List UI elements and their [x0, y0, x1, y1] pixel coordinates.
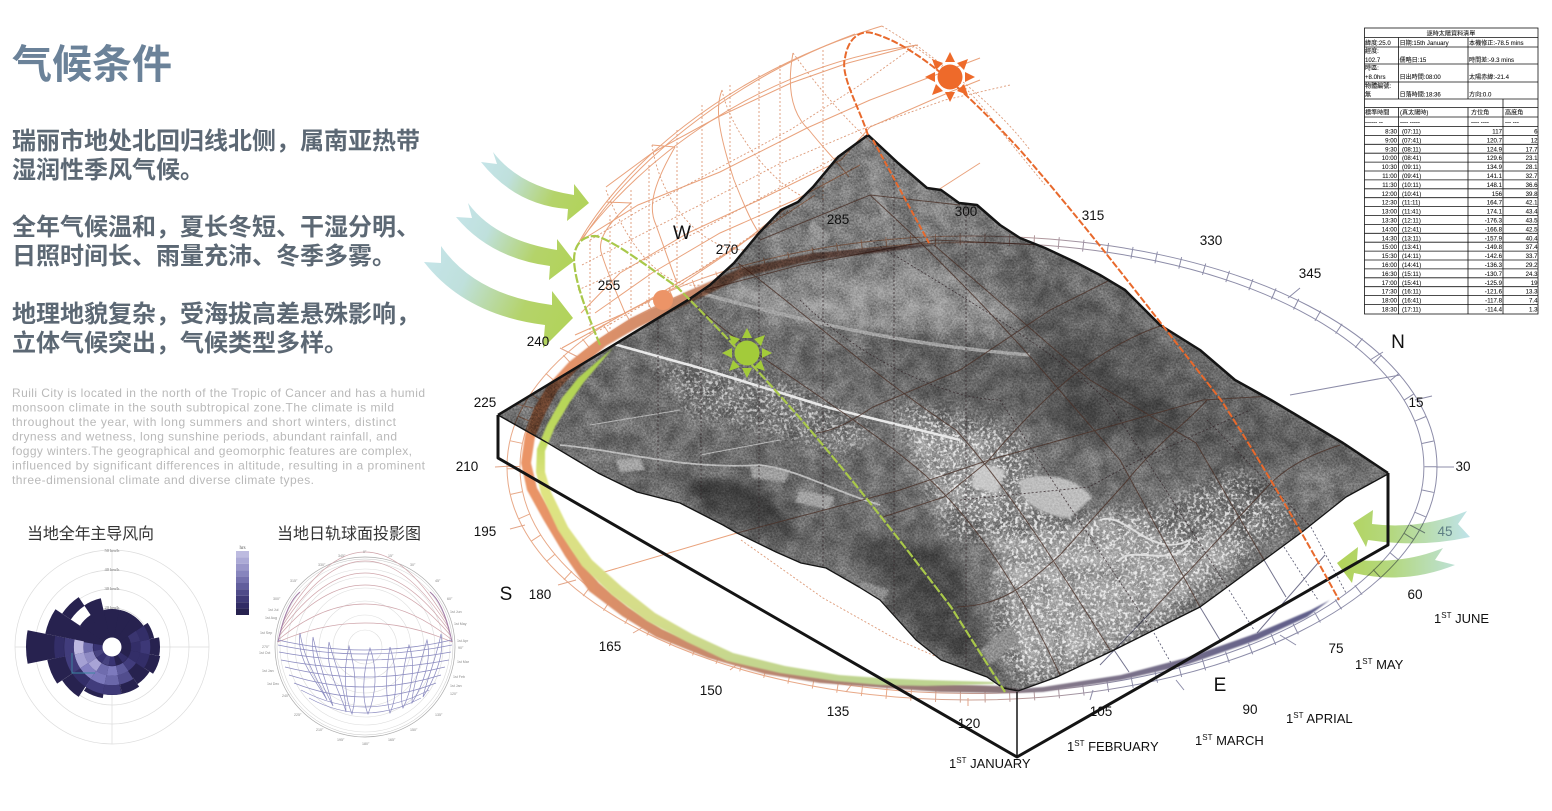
- table: hourly sun data: -166.8: [1485, 226, 1503, 233]
- table: hourly sun data: 129.6: [1487, 155, 1503, 162]
- labels: months: 1: [1434, 611, 1441, 626]
- table: hourly sun data: 日落時間:18:36: [1400, 90, 1441, 98]
- table: hourly sun data: 7.4: [1529, 298, 1538, 305]
- table: hourly sun data: (13:11): [1402, 235, 1421, 242]
- labels: compass degrees: 30: [1455, 459, 1471, 474]
- chart: sun path stereographic projection: 1st Aug: [265, 616, 277, 620]
- table: hourly sun data: (真太陽時): [1400, 108, 1428, 116]
- table: hourly sun data: 物體編號:: [1365, 82, 1391, 90]
- table: hourly sun data: 時間差:-9.3 mins: [1469, 56, 1514, 64]
- table: hourly sun data: -114.4: [1485, 306, 1503, 314]
- chart: sun path stereographic projection: 270°: [262, 645, 270, 649]
- solid grid on east side: [1100, 555, 1325, 672]
- labels: compass degrees: 165: [599, 639, 621, 654]
- labels: months: FEBRUARY: [1084, 739, 1159, 754]
- table: hourly sun data: 16:30: [1382, 271, 1398, 278]
- table: hourly sun data: 15:00: [1382, 244, 1398, 251]
- table: hourly sun data: (16:41): [1402, 298, 1421, 305]
- labels: compass degrees: 225: [474, 395, 496, 410]
- table: hourly sun data: 17:00: [1382, 280, 1398, 287]
- chart: sun path stereographic projection: 1st Oct: [259, 651, 270, 655]
- table: hourly sun data: 經度:: [1365, 47, 1379, 55]
- labels: months: ST: [1202, 733, 1213, 742]
- labels: compass degrees: 345: [1299, 266, 1321, 281]
- labels: months: ST: [1441, 611, 1452, 620]
- table: hourly sun data: 時區:: [1365, 64, 1379, 72]
- chart: wind rose: 40 km/h: [105, 567, 120, 572]
- text block: english climate description: monsoon climate in the south subtropical zone.The climate is mild: [12, 400, 394, 414]
- table: hourly sun data: 18:00: [1382, 298, 1398, 305]
- text block: english climate description: [12, 386, 426, 487]
- labels: cardinal directions: E: [1214, 675, 1226, 696]
- icon: green sun: [722, 328, 772, 378]
- table: hourly sun data: (10:11): [1402, 182, 1421, 189]
- labels: compass degrees: 60: [1407, 587, 1423, 602]
- table: hourly sun data: (16:11): [1402, 289, 1421, 296]
- table: hourly sun data: 33.7: [1526, 253, 1538, 260]
- text block: english climate description: dryness and wetness, long sunshine periods, abundant rainfall, and: [12, 430, 397, 444]
- table: hourly sun data: 32.7: [1526, 173, 1538, 180]
- table: hourly sun data: -176.3: [1485, 218, 1503, 224]
- labels: compass degrees: 180: [529, 587, 551, 602]
- table: hourly sun data: 12: [1531, 137, 1538, 144]
- chart: wind rose: [15, 548, 209, 744]
- table: hourly sun data: 11:00: [1382, 173, 1398, 180]
- text block: english climate description: influenced by significant differences in altitude, resulting in a prominent: [12, 458, 426, 472]
- table: hourly sun data: 164.7: [1487, 200, 1503, 207]
- chart: sun path stereographic projection: 1st Jun: [450, 610, 462, 614]
- table: hourly sun data: -136.3: [1485, 262, 1503, 269]
- table: hourly sun data: 24.3: [1526, 271, 1538, 278]
- table: hourly sun data: 23.1: [1526, 155, 1538, 162]
- table: hourly sun data: (11:41): [1402, 209, 1421, 216]
- table: hourly sun data: 9:30: [1385, 146, 1398, 153]
- table: hourly sun data: 37.4: [1526, 244, 1538, 251]
- title: 气候条件: [12, 43, 172, 87]
- chart: sun path stereographic projection: 345°: [338, 554, 346, 558]
- chart: sun path stereographic projection: 240°: [282, 694, 290, 698]
- table: hourly sun data: 156: [1492, 191, 1503, 198]
- labels: months: 1: [949, 756, 956, 771]
- chart: sun path stereographic projection: 330°: [318, 563, 326, 567]
- table: hourly sun data: 18:30: [1382, 306, 1398, 314]
- heading: sun path: 当地日轨球面投影图: [277, 525, 421, 543]
- sun path: summer projection: [873, 140, 929, 243]
- table: hourly sun data: (15:41): [1402, 280, 1421, 287]
- labels: months: 1: [1195, 733, 1202, 748]
- arrow: west wind 2: [456, 203, 574, 280]
- table: hourly sun data: 36.6: [1526, 182, 1538, 189]
- text block: chinese climate description: 全年气候温和，夏长冬短、干湿分明、: [12, 214, 420, 241]
- labels: months: MARCH: [1212, 733, 1264, 748]
- chart: sun path stereographic projection: 90°: [458, 646, 464, 650]
- labels: compass degrees: [456, 204, 1471, 731]
- table: hourly sun data: [1364, 28, 1538, 314]
- text block: english climate description: foggy winters.The geographical and geomorphic features are complex,: [12, 444, 412, 458]
- table: hourly sun data: ---- -----: [1400, 119, 1420, 126]
- table: hourly sun data: 148.1: [1487, 182, 1503, 189]
- chart: sun path stereographic projection: 225°: [294, 713, 302, 717]
- table: hourly sun data: 儒略日:15: [1400, 56, 1427, 64]
- labels: cardinal directions: S: [500, 584, 512, 605]
- table: hourly sun data: 15:30: [1382, 253, 1398, 260]
- text block: english climate description: Ruili City is located in the north of the Tropic of Cancer and has a humid: [12, 386, 425, 400]
- block: box edges: [498, 135, 1388, 757]
- labels: compass degrees: 135: [827, 704, 849, 719]
- sun path: winter green: [574, 236, 1005, 692]
- labels: cardinal directions: W: [673, 223, 691, 244]
- table: hourly sun data: -130.7: [1485, 271, 1503, 278]
- table: hourly sun data: 逐時太陽資料清單: [1427, 30, 1475, 38]
- dotted sphere grid: [578, 26, 1045, 657]
- table: hourly sun data: +8.0hrs: [1365, 74, 1386, 81]
- table: hourly sun data: 13.3: [1526, 289, 1538, 296]
- table: hourly sun data: 10:00: [1382, 155, 1398, 162]
- table: hourly sun data: 方位角: [1471, 108, 1489, 116]
- labels: months: JUNE: [1451, 611, 1489, 626]
- table: hourly sun data: -142.6: [1485, 253, 1503, 260]
- table: hourly sun data: 1.3: [1529, 306, 1538, 314]
- labels: compass degrees: 120: [958, 716, 980, 731]
- arrow: east wind 2: [1337, 547, 1455, 583]
- labels: compass degrees: 255: [598, 278, 620, 293]
- table: hourly sun data: -125.9: [1485, 280, 1503, 287]
- chart: sun path stereographic projection: 165°: [388, 738, 396, 742]
- chart: sun path stereographic projection: [259, 550, 470, 746]
- table: hourly sun data: 11:30: [1382, 182, 1398, 189]
- table: hourly sun data: 29.2: [1526, 262, 1538, 269]
- chart: sun path stereographic projection: 1st Sep: [260, 631, 272, 635]
- table: hourly sun data: (15:11): [1402, 271, 1421, 278]
- table: hourly sun data: ------ --: [1365, 119, 1383, 126]
- table: hourly sun data: (07:11): [1402, 128, 1421, 136]
- table: hourly sun data: 134.9: [1487, 164, 1503, 171]
- labels: months: ST: [1074, 739, 1085, 748]
- chart: sun path stereographic projection: 30°: [410, 563, 416, 567]
- labels: months: ST: [1362, 657, 1373, 666]
- compass ring: [507, 236, 1437, 700]
- table: hourly sun data: (08:11): [1402, 146, 1421, 153]
- legend: hours: [236, 546, 249, 615]
- text block: chinese climate description: 瑞丽市地处北回归线北侧，属南亚热带: [12, 128, 420, 155]
- table: hourly sun data: 17:30: [1382, 289, 1398, 296]
- labels: compass degrees: 195: [474, 524, 496, 539]
- labels: compass degrees: 75: [1328, 641, 1344, 656]
- chart: sun path stereographic projection: 210°: [316, 728, 324, 732]
- chart: sun path stereographic projection: 1st Jan: [450, 684, 462, 688]
- labels: compass degrees: 315: [1082, 208, 1104, 223]
- chart: sun path stereographic projection: 300°: [273, 597, 281, 601]
- chart: sun path stereographic projection: 15°: [388, 554, 394, 558]
- table: hourly sun data: -121.6: [1485, 289, 1503, 296]
- labels: compass degrees: 150: [700, 683, 722, 698]
- text block: chinese climate description: 地理地貌复杂，受海拔高差悬殊影响，: [12, 301, 420, 328]
- table: hourly sun data: -149.8: [1485, 244, 1503, 251]
- seasonal green band: [536, 348, 994, 686]
- chart: sun path stereographic projection: 0°: [363, 550, 367, 554]
- table: hourly sun data: 17.7: [1526, 146, 1538, 153]
- labels: months: [949, 611, 1489, 771]
- labels: compass degrees: 270: [716, 242, 738, 257]
- labels: months: ST: [1293, 711, 1304, 720]
- labels: compass degrees: 285: [827, 212, 849, 227]
- table: hourly sun data: 120.7: [1487, 137, 1503, 144]
- arrows: left wind: [424, 152, 589, 348]
- chart: sun path stereographic projection: 1st Dec: [267, 682, 279, 686]
- table: hourly sun data: 13:30: [1382, 218, 1398, 224]
- text block: english climate description: throughout the year, with long summers and short winters, distinct: [12, 415, 397, 429]
- table: hourly sun data: 太陽赤緯:-21.4: [1469, 73, 1510, 81]
- chart: wind rose: 50 km/h: [105, 548, 120, 553]
- labels: months: MAY: [1372, 657, 1404, 672]
- seasonal blue band: [1018, 600, 1330, 693]
- table: hourly sun data: (09:11): [1402, 164, 1421, 171]
- table: hourly sun data: 19: [1531, 280, 1538, 287]
- sun path: summer orange: [844, 32, 1339, 600]
- table: hourly sun data: 日期:15th January: [1400, 39, 1450, 47]
- table: hourly sun data: 標準時間: [1365, 108, 1389, 116]
- table: hourly sun data: ---- ----: [1471, 119, 1489, 126]
- table: hourly sun data: 方向:0.0: [1469, 90, 1492, 98]
- text block: chinese climate description: 湿润性季风气候。: [12, 157, 204, 184]
- labels: compass degrees: 210: [456, 459, 478, 474]
- chart: sun path stereographic projection: 1st Jul: [268, 608, 279, 612]
- table: hourly sun data: (11:11): [1402, 200, 1420, 207]
- table: hourly sun data: 12:00: [1382, 191, 1398, 198]
- labels: months: APRIAL: [1303, 711, 1353, 726]
- text block: chinese climate description: [12, 128, 420, 357]
- table: hourly sun data: 無: [1365, 90, 1371, 98]
- table: hourly sun data: 14:30: [1382, 235, 1398, 242]
- labels: months: 1: [1355, 657, 1362, 672]
- table: hourly sun data: (08:41): [1402, 155, 1421, 162]
- table: hourly sun data: 43.4: [1526, 209, 1538, 216]
- table: hourly sun data: (07:41): [1402, 137, 1421, 144]
- labels: compass degrees: 45: [1437, 524, 1453, 539]
- table: hourly sun data: (14:11): [1402, 253, 1421, 260]
- table: hourly sun data: (14:41): [1402, 262, 1421, 269]
- table: hourly sun data: 本機修正:-78.5 mins: [1469, 39, 1524, 47]
- table: hourly sun data: (12:11): [1402, 218, 1421, 224]
- table: hourly sun data: (12:41): [1402, 226, 1421, 233]
- icon: orange marker dot: [653, 290, 673, 310]
- labels: months: 1: [1067, 739, 1074, 754]
- table: hourly sun data: 高度角: [1505, 108, 1523, 116]
- chart: sun path stereographic projection: 45°: [435, 579, 441, 583]
- table: hourly sun data: 141.1: [1487, 173, 1503, 180]
- chart: sun path stereographic projection: 1st Feb: [453, 675, 465, 679]
- icon: orange sun: [925, 52, 975, 102]
- text block: chinese climate description: 日照时间长、雨量充沛、冬季多雾。: [12, 243, 396, 270]
- table: hourly sun data: 39.8: [1526, 191, 1538, 198]
- table: hourly sun data: 9:00: [1385, 137, 1398, 144]
- chart: sun path stereographic projection: 1st Apr: [457, 639, 469, 643]
- labels: months: JANUARY: [966, 756, 1031, 771]
- chart: sun path stereographic projection: 60°: [447, 597, 453, 601]
- chart: wind rose: 30 km/h: [105, 586, 120, 591]
- table: hourly sun data: 42.5: [1526, 226, 1538, 233]
- table: hourly sun data: --- ---: [1505, 119, 1519, 126]
- legend: hours: hrs: [239, 546, 246, 551]
- table: hourly sun data: 緯度:25.0: [1365, 39, 1391, 47]
- wireframe: sun path sphere and compass ring: [495, 26, 1454, 706]
- compass long ticks: [495, 348, 968, 706]
- table: hourly sun data: 13:00: [1382, 209, 1398, 216]
- text block: english climate description: three-dimensional climate and diverse climate types.: [12, 473, 314, 487]
- table: hourly sun data: 117: [1492, 128, 1503, 136]
- labels: compass degrees: 330: [1200, 233, 1222, 248]
- table: hourly sun data: 8:30: [1385, 128, 1398, 136]
- chart: sun path stereographic projection: 150°: [410, 728, 418, 732]
- table: hourly sun data: 43.5: [1526, 218, 1538, 224]
- chart: sun path stereographic projection: 1st Mar: [457, 660, 470, 664]
- arrow: east wind 1: [1353, 510, 1470, 547]
- table: hourly sun data: 102.7: [1365, 57, 1381, 64]
- table: hourly sun data: (09:41): [1402, 173, 1421, 180]
- table: hourly sun data: (13:41): [1402, 244, 1421, 251]
- chart: wind rose: 20 km/h: [105, 605, 120, 610]
- chart: sun path stereographic projection: 120°: [450, 692, 458, 696]
- table: hourly sun data: (10:41): [1402, 191, 1421, 198]
- labels: compass degrees: 240: [527, 334, 549, 349]
- table: hourly sun data: 6: [1534, 128, 1538, 136]
- table: hourly sun data: -117.8: [1485, 298, 1503, 305]
- terrain grid: lines over terrain: [658, 160, 1340, 675]
- labels: compass degrees: 15: [1408, 395, 1424, 410]
- table: hourly sun data: 28.1: [1526, 164, 1538, 171]
- table: hourly sun data: 16:00: [1382, 262, 1398, 269]
- labels: compass degrees: 300: [955, 204, 977, 219]
- table: hourly sun data: (17:11): [1402, 306, 1421, 314]
- arrows: right wind: [1337, 510, 1470, 583]
- arrow: west wind 1: [481, 152, 589, 221]
- heading: wind rose: 当地全年主导风向: [27, 525, 154, 543]
- table: hourly sun data: 12:30: [1382, 200, 1398, 207]
- table: hourly sun data: 42.1: [1526, 200, 1538, 207]
- chart: sun path stereographic projection: 1st May: [454, 622, 467, 626]
- chart: sun path stereographic projection: 315°: [290, 579, 298, 583]
- table: hourly sun data: 174.1: [1487, 209, 1503, 216]
- chart: sun path stereographic projection: 180°: [362, 742, 370, 746]
- table: hourly sun data: -157.9: [1485, 235, 1503, 242]
- labels: months: 1: [1286, 711, 1293, 726]
- table: hourly sun data: 日出時間:08:00: [1400, 73, 1441, 81]
- table: hourly sun data: 124.9: [1487, 146, 1503, 153]
- chart: sun path stereographic projection: 1st Jan: [262, 669, 274, 673]
- labels: cardinal directions: [500, 223, 1405, 696]
- labels: months: ST: [956, 756, 967, 765]
- table: hourly sun data: 10:30: [1382, 164, 1398, 171]
- labels: cardinal directions: N: [1391, 332, 1405, 353]
- table: hourly sun data: 14:00: [1382, 226, 1398, 233]
- text block: chinese climate description: 立体气候突出，气候类型多样。: [12, 330, 348, 357]
- terrain: aerial photo relief: [490, 130, 1400, 700]
- seasonal orange band: [521, 244, 1018, 693]
- chart: sun path stereographic projection: 135°: [435, 713, 443, 717]
- arrow: west wind 3: [424, 246, 573, 348]
- dome contours: [562, 26, 980, 573]
- table: hourly sun data: 40.4: [1526, 235, 1538, 242]
- chart: sun path stereographic projection: 195°: [337, 738, 345, 742]
- labels: compass degrees: 105: [1090, 704, 1112, 719]
- labels: compass degrees: 90: [1242, 702, 1258, 717]
